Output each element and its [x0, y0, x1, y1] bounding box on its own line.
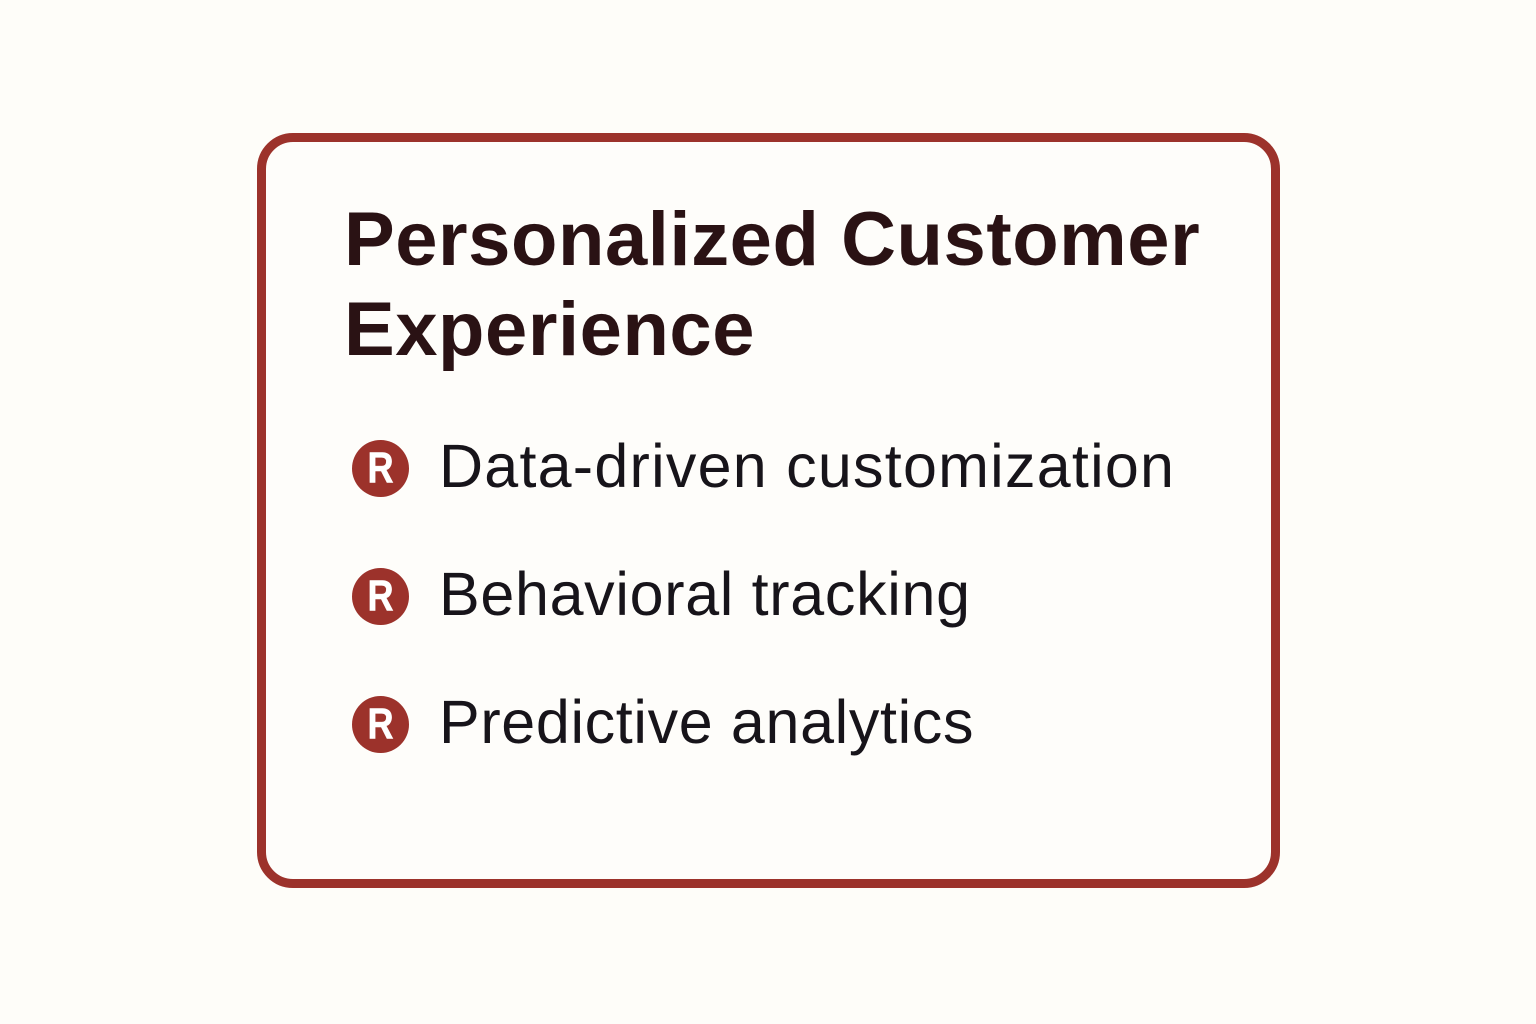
panel: personalized customer experience card: [257, 133, 1280, 888]
icon: R badge: R: [367, 701, 394, 749]
title: Personalized Customer: [344, 197, 1200, 282]
icon: R badge: [352, 696, 409, 753]
icon: R badge: R: [367, 445, 394, 493]
list item: predictive analytics: [352, 688, 974, 756]
icon: R badge: R: [367, 573, 394, 621]
title: Experience: [344, 287, 755, 372]
list item: behavioral tracking: [352, 560, 971, 628]
text: predictive analytics: Predictive analytics: [439, 688, 974, 756]
icon: R badge: [352, 568, 409, 625]
text: data-driven customization: Data-driven customization: [439, 432, 1175, 500]
title: [344, 197, 1200, 372]
text: behavioral tracking: Behavioral tracking: [439, 560, 971, 628]
list item: data-driven customization: [352, 432, 1175, 500]
icon: R badge: [352, 440, 409, 497]
